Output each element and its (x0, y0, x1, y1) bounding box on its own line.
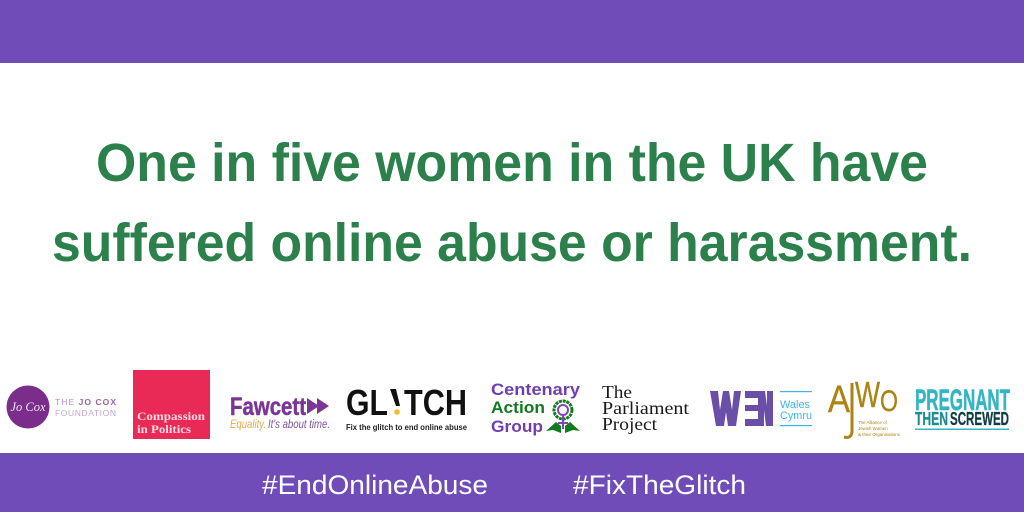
logo: Jo Cox Foundation: THE JO COX (55, 397, 116, 407)
logo: Compassion in Politics: in Politics (137, 422, 191, 436)
logo: Fawcett: Fawcett (230, 393, 307, 421)
logo: Centenary Action Group (491, 380, 581, 436)
logo: Centenary Action Group: Action (491, 398, 545, 417)
bottom purple band (0, 453, 1024, 512)
logo: Glitch (346, 382, 468, 432)
logo: AJWO: The Alliance of (858, 420, 888, 425)
logo: Fawcett: It's about time. (268, 417, 330, 431)
hashtag: EndOnlineAbuse: #EndOnlineAbuse (262, 470, 488, 500)
icon: rosette (546, 401, 580, 433)
logo: Jo Cox Foundation: FOUNDATION (55, 408, 116, 418)
logo: The Parliament Project (602, 382, 689, 434)
logo: Centenary Action Group: Group (491, 417, 543, 436)
logo: AJWO: & their Organisations (858, 432, 901, 437)
logo: AJWO: O (880, 385, 898, 418)
heading: suffered online abuse or harassment. (52, 213, 972, 273)
logo: AJWO (828, 374, 901, 437)
logo: WEN Wales Cymru (710, 391, 812, 426)
logo: WEN Wales Cymru: Wales (780, 399, 810, 411)
logo: Jo Cox Foundation: Jo Cox (10, 400, 46, 414)
logo: Compassion in Politics: Compassion (137, 409, 205, 423)
logo: Pregnant Then Screwed: THEN (915, 409, 948, 429)
logo: AJWO: Jewish Women (858, 426, 888, 431)
logo: WEN Wales Cymru: Cymru (780, 410, 812, 422)
logo: Pregnant Then Screwed (915, 384, 1010, 430)
heading: One in five women in the UK have (96, 133, 928, 193)
logo: AJWO: A (828, 379, 851, 421)
logo: The Parliament Project: Project (602, 414, 657, 434)
logo: AJWO: W (855, 374, 880, 415)
logo: Compassion in Politics (133, 370, 210, 439)
logo: Glitch: GL (346, 382, 388, 423)
logo: Jo Cox Foundation (6, 386, 116, 428)
logo: The Parliament Project: Parliament (602, 398, 689, 418)
heading (52, 133, 972, 273)
logo: Glitch: TCH (404, 382, 467, 423)
logo: Centenary Action Group: Centenary (491, 380, 581, 399)
hashtag: FixTheGlitch: #FixTheGlitch (573, 470, 746, 500)
logo: Fawcett (230, 393, 330, 431)
logo: The Parliament Project: The (602, 382, 632, 402)
logo: Fawcett: Equality. (230, 417, 266, 431)
logo: Glitch: Fix the glitch to end online abuse (346, 423, 468, 432)
top purple band (0, 0, 1024, 63)
